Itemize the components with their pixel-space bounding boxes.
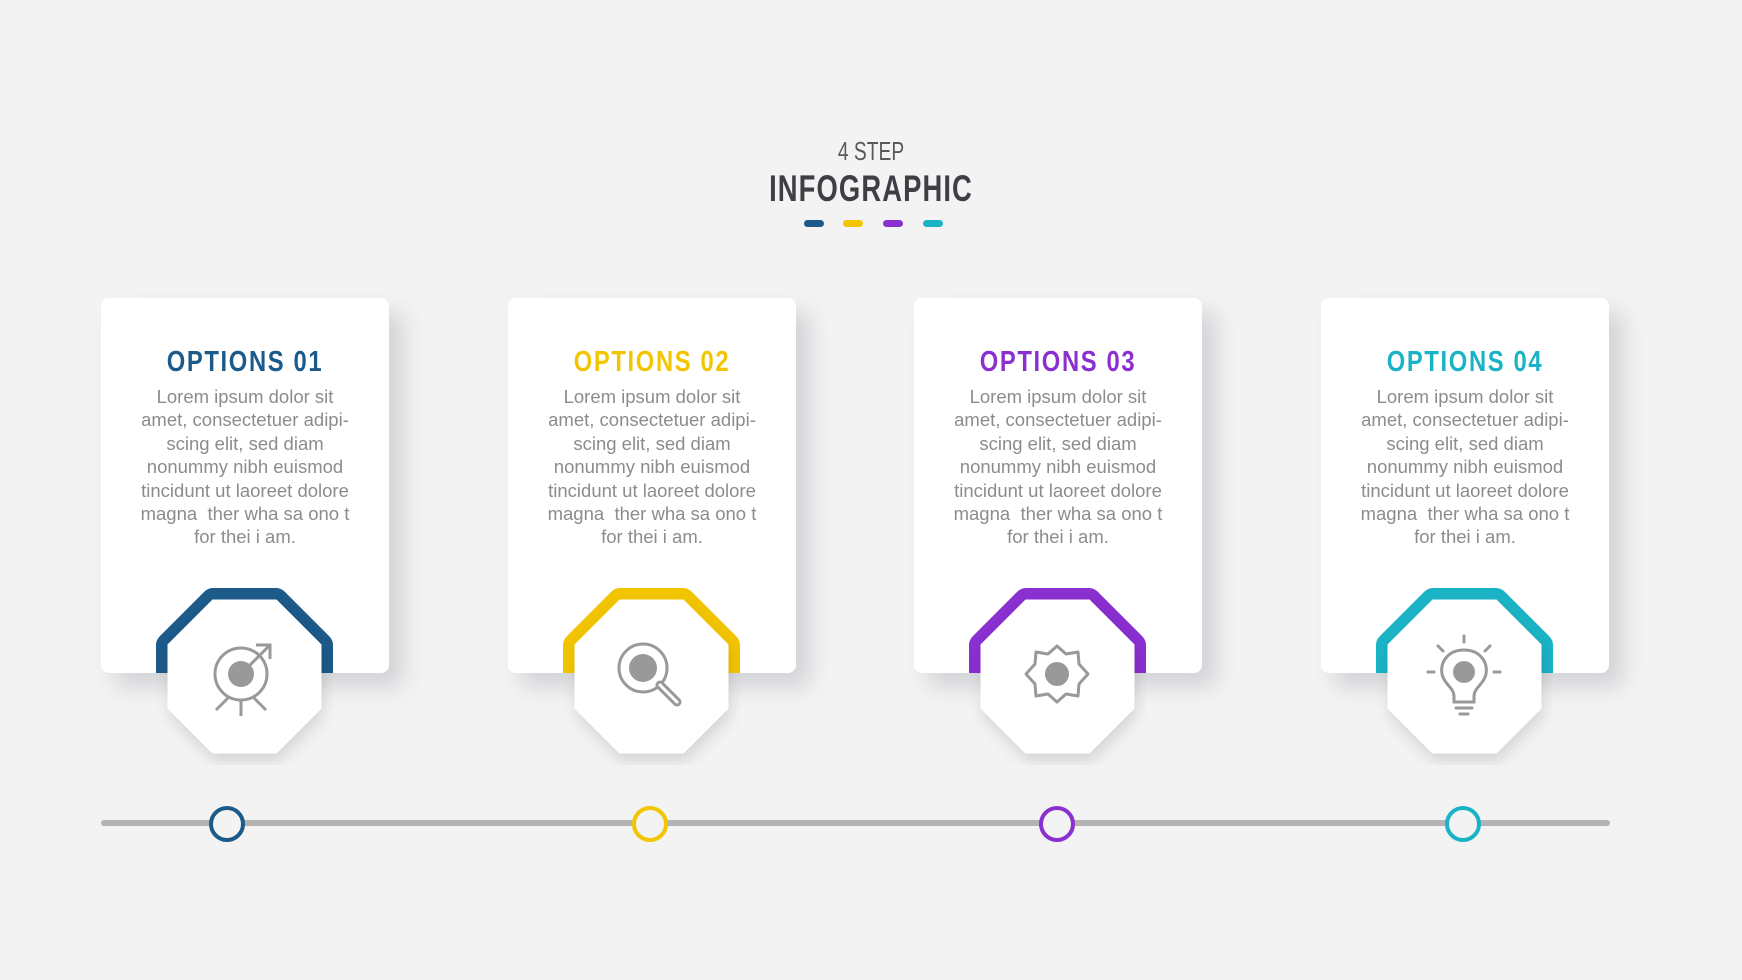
text block: amet, consectetuer adipi- — [141, 409, 349, 430]
text block: for thei i am. — [1414, 526, 1516, 547]
text block: scing elit, sed diam — [1386, 433, 1544, 454]
text block: tincidunt ut laoreet dolore — [548, 480, 756, 501]
text block: scing elit, sed diam — [573, 433, 731, 454]
panel: option 02 — [508, 298, 796, 673]
text block: nonummy nibh euismod — [1367, 456, 1563, 477]
text block: amet, consectetuer adipi- — [548, 409, 756, 430]
icon: target (octagon 01) — [156, 588, 333, 765]
text block: amet, consectetuer adipi- — [954, 409, 1162, 430]
panel: option 03 — [914, 298, 1202, 673]
text block: tincidunt ut laoreet dolore — [141, 480, 349, 501]
heading: OPTIONS 02 — [574, 346, 730, 378]
heading: INFOGRAPHIC: INFOGRAPHIC — [769, 168, 973, 209]
text block: magna ther wha sa ono t — [954, 503, 1162, 524]
text block: nonummy nibh euismod — [147, 456, 343, 477]
text block: nonummy nibh euismod — [960, 456, 1156, 477]
timeline — [101, 820, 1610, 826]
text block: Lorem ipsum dolor sit — [564, 386, 740, 407]
panel: option 04 — [1321, 298, 1609, 673]
subtitle: 4 STEP: 4 STEP — [838, 136, 904, 166]
text block: Lorem ipsum dolor sit — [970, 386, 1146, 407]
heading: OPTIONS 03 — [980, 346, 1136, 378]
text block: magna ther wha sa ono t — [548, 503, 756, 524]
text block: magna ther wha sa ono t — [1361, 503, 1569, 524]
text block: scing elit, sed diam — [979, 433, 1137, 454]
marker 01 — [209, 806, 245, 842]
color dashes — [804, 220, 943, 227]
text block: scing elit, sed diam — [166, 433, 324, 454]
icon: magnifier (octagon 02) — [563, 588, 740, 765]
text block — [141, 386, 350, 547]
text block: nonummy nibh euismod — [554, 456, 750, 477]
text block: magna ther wha sa ono t — [141, 503, 349, 524]
icon: gear (octagon 03) — [969, 588, 1146, 765]
heading: OPTIONS 04 — [1387, 346, 1543, 378]
text block: amet, consectetuer adipi- — [1361, 409, 1569, 430]
panel: option 01 — [101, 298, 389, 673]
text block: Lorem ipsum dolor sit — [1377, 386, 1553, 407]
text block: for thei i am. — [1007, 526, 1109, 547]
icon: light bulb (octagon 04) — [1376, 588, 1553, 765]
text block — [954, 386, 1162, 547]
text block — [548, 386, 756, 547]
marker 04 — [1445, 806, 1481, 842]
marker 03 — [1039, 806, 1075, 842]
text block: tincidunt ut laoreet dolore — [954, 480, 1162, 501]
title — [769, 136, 973, 209]
text block: for thei i am. — [601, 526, 703, 547]
text block: Lorem ipsum dolor sit — [157, 386, 333, 407]
text block: for thei i am. — [194, 526, 296, 547]
text block — [1361, 386, 1570, 547]
marker 02 — [632, 806, 668, 842]
heading: OPTIONS 01 — [167, 346, 323, 378]
text block: tincidunt ut laoreet dolore — [1361, 480, 1569, 501]
